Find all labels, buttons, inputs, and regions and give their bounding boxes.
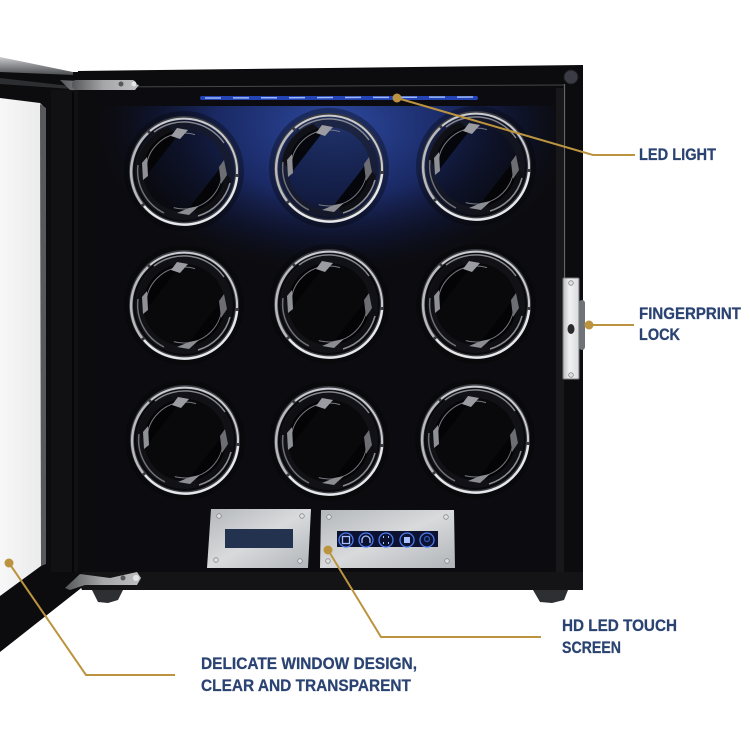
callout: touch screen: HD LED TOUCH [562, 617, 677, 635]
callout: fingerprint lock: FINGERPRINT [639, 305, 741, 323]
fingerprint lock [563, 278, 585, 379]
door window [0, 98, 45, 596]
feet [92, 590, 568, 603]
callout: window design: CLEAR AND TRANSPARENT [201, 677, 411, 695]
window edge trim [40, 104, 46, 566]
left foot [92, 590, 123, 603]
callout: window design [4, 558, 417, 695]
door frame [0, 72, 103, 652]
keyhole [568, 324, 574, 334]
callout: fingerprint lock: LOCK [639, 326, 680, 344]
holder row 3 [125, 379, 535, 501]
callout: touch screen: SCREEN [562, 639, 621, 657]
cabinet interior [97, 88, 565, 572]
bottom hinge [65, 572, 141, 590]
top hinge [60, 80, 139, 90]
door velvet seam [72, 92, 74, 572]
callout: touch screen [324, 546, 677, 657]
bottom rail [82, 572, 583, 590]
interior top ledge [97, 85, 565, 87]
touch screen panel [320, 510, 455, 568]
callout: fingerprint lock [584, 305, 741, 344]
corner screw [564, 70, 578, 84]
door frame highlight [0, 78, 72, 89]
LED light strip [200, 96, 478, 100]
watch holders grid [124, 106, 536, 501]
callout: LED light: LED LIGHT [639, 146, 716, 164]
lock plate [563, 278, 579, 379]
plate screws [569, 281, 573, 285]
cabinet outer shell [78, 65, 583, 590]
lock knob [579, 300, 585, 350]
open glass door [0, 57, 103, 652]
cabinet body [78, 65, 583, 590]
interior right edge [564, 84, 566, 278]
interior side shading [556, 88, 564, 572]
touch icons [339, 533, 434, 547]
right foot [533, 590, 568, 603]
LCD display panel [207, 509, 311, 568]
holder row 1 [124, 106, 536, 231]
callout: LED light [392, 94, 716, 164]
callout: window design: DELICATE WINDOW DESIGN, [201, 655, 417, 673]
holder row 2 [124, 244, 536, 365]
door top edge [0, 57, 73, 75]
blue interior glow [100, 106, 555, 276]
door velvet inner strip [51, 90, 97, 572]
